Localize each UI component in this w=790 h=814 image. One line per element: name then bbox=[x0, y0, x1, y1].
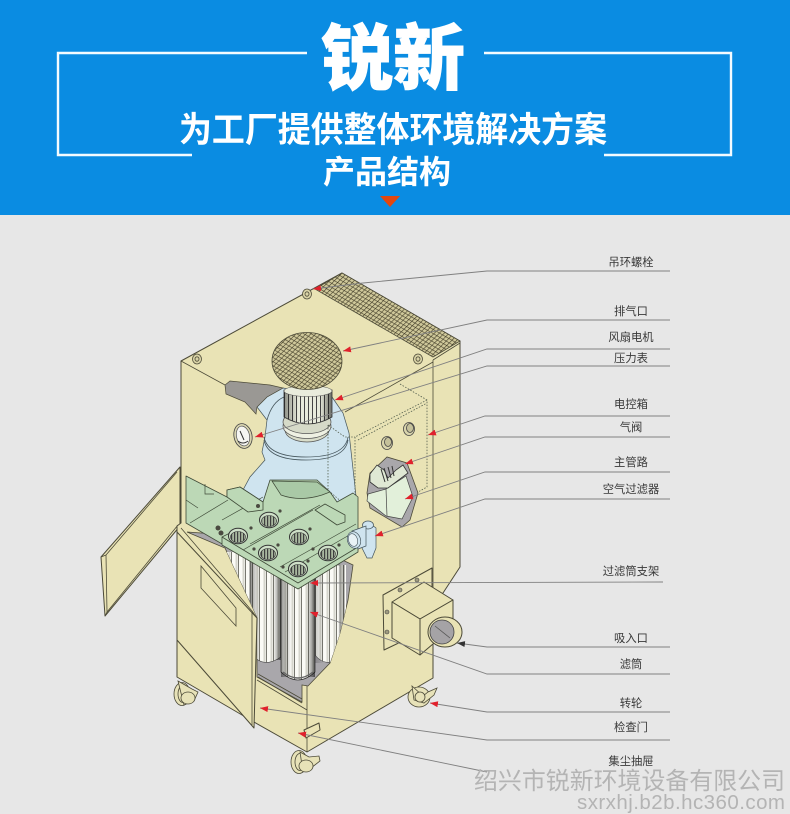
inspection door bbox=[177, 528, 257, 728]
exhaust vent bbox=[225, 381, 283, 414]
part labels: 排气口 bbox=[614, 304, 648, 318]
caster left bbox=[174, 681, 198, 706]
deck rim bbox=[222, 537, 358, 589]
icon: down arrow bbox=[380, 196, 400, 207]
part labels: 转轮 bbox=[620, 696, 642, 710]
part labels bbox=[603, 255, 659, 768]
leader lines bbox=[255, 271, 670, 772]
cabinet body bbox=[177, 273, 460, 752]
part labels: 滤筒 bbox=[620, 657, 642, 671]
pressure gauge bbox=[232, 422, 254, 450]
part labels: 吸入口 bbox=[614, 632, 648, 645]
brand title: 锐新 bbox=[321, 20, 465, 100]
wing nuts bbox=[216, 504, 341, 569]
dust drawer bbox=[257, 674, 320, 752]
caster right bbox=[408, 686, 437, 707]
interior cavity bbox=[187, 532, 353, 702]
filter 2 bbox=[250, 560, 281, 662]
blue fan housing bbox=[243, 388, 357, 510]
part labels: 检查门 bbox=[614, 720, 648, 734]
filter 4 bbox=[315, 565, 346, 663]
caster front bbox=[291, 750, 320, 774]
filter 3 bbox=[281, 575, 315, 680]
part labels: 压力表 bbox=[614, 351, 648, 365]
part labels: 主管路 bbox=[614, 455, 648, 469]
watermark bbox=[474, 768, 785, 814]
filter 1 bbox=[226, 552, 250, 602]
deck ridges bbox=[186, 484, 358, 572]
part labels: 风扇电机 bbox=[608, 330, 654, 344]
lifting eye bolts bbox=[192, 289, 422, 364]
green filter support deck bbox=[186, 476, 358, 589]
part labels: 电控箱 bbox=[614, 397, 648, 411]
housing arcs bbox=[264, 397, 348, 460]
section heading: 产品结构 bbox=[323, 154, 451, 190]
part labels: 过滤筒支架 bbox=[603, 564, 659, 578]
suction inlet box bbox=[383, 568, 462, 655]
part labels: 气阀 bbox=[620, 420, 642, 434]
clamp blocks bbox=[227, 487, 263, 512]
opened door bbox=[101, 467, 180, 616]
filter cartridges bbox=[222, 552, 346, 680]
part labels: 集尘抽屉 bbox=[608, 754, 654, 768]
watermark: sxrxhj.b2b.hc360.com bbox=[577, 791, 785, 814]
inlet duct bbox=[392, 582, 453, 619]
watermark: 绍兴市锐新环境设备有限公司 bbox=[474, 768, 785, 795]
cabinet edges bbox=[181, 343, 460, 678]
top mesh vent bbox=[315, 273, 460, 357]
header banner bbox=[0, 0, 790, 215]
control box dashed outline bbox=[328, 384, 427, 505]
round exhaust mesh bbox=[272, 332, 342, 390]
part labels: 吊环螺栓 bbox=[608, 255, 654, 269]
air valve cutout bbox=[367, 457, 418, 527]
inlet ring bbox=[428, 617, 462, 647]
fan motor bbox=[283, 386, 332, 442]
control box buttons bbox=[382, 422, 414, 450]
part labels: 空气过滤器 bbox=[603, 482, 659, 496]
machine illustration bbox=[101, 273, 462, 774]
inlet flange bbox=[383, 568, 432, 650]
fan outlet recess bbox=[272, 481, 330, 498]
air filter regulator bbox=[345, 521, 376, 558]
header frame bbox=[58, 53, 731, 155]
slogan: 为工厂提供整体环境解决方案 bbox=[179, 111, 607, 150]
drawer handle bbox=[304, 723, 320, 738]
filter holes bbox=[228, 512, 338, 577]
